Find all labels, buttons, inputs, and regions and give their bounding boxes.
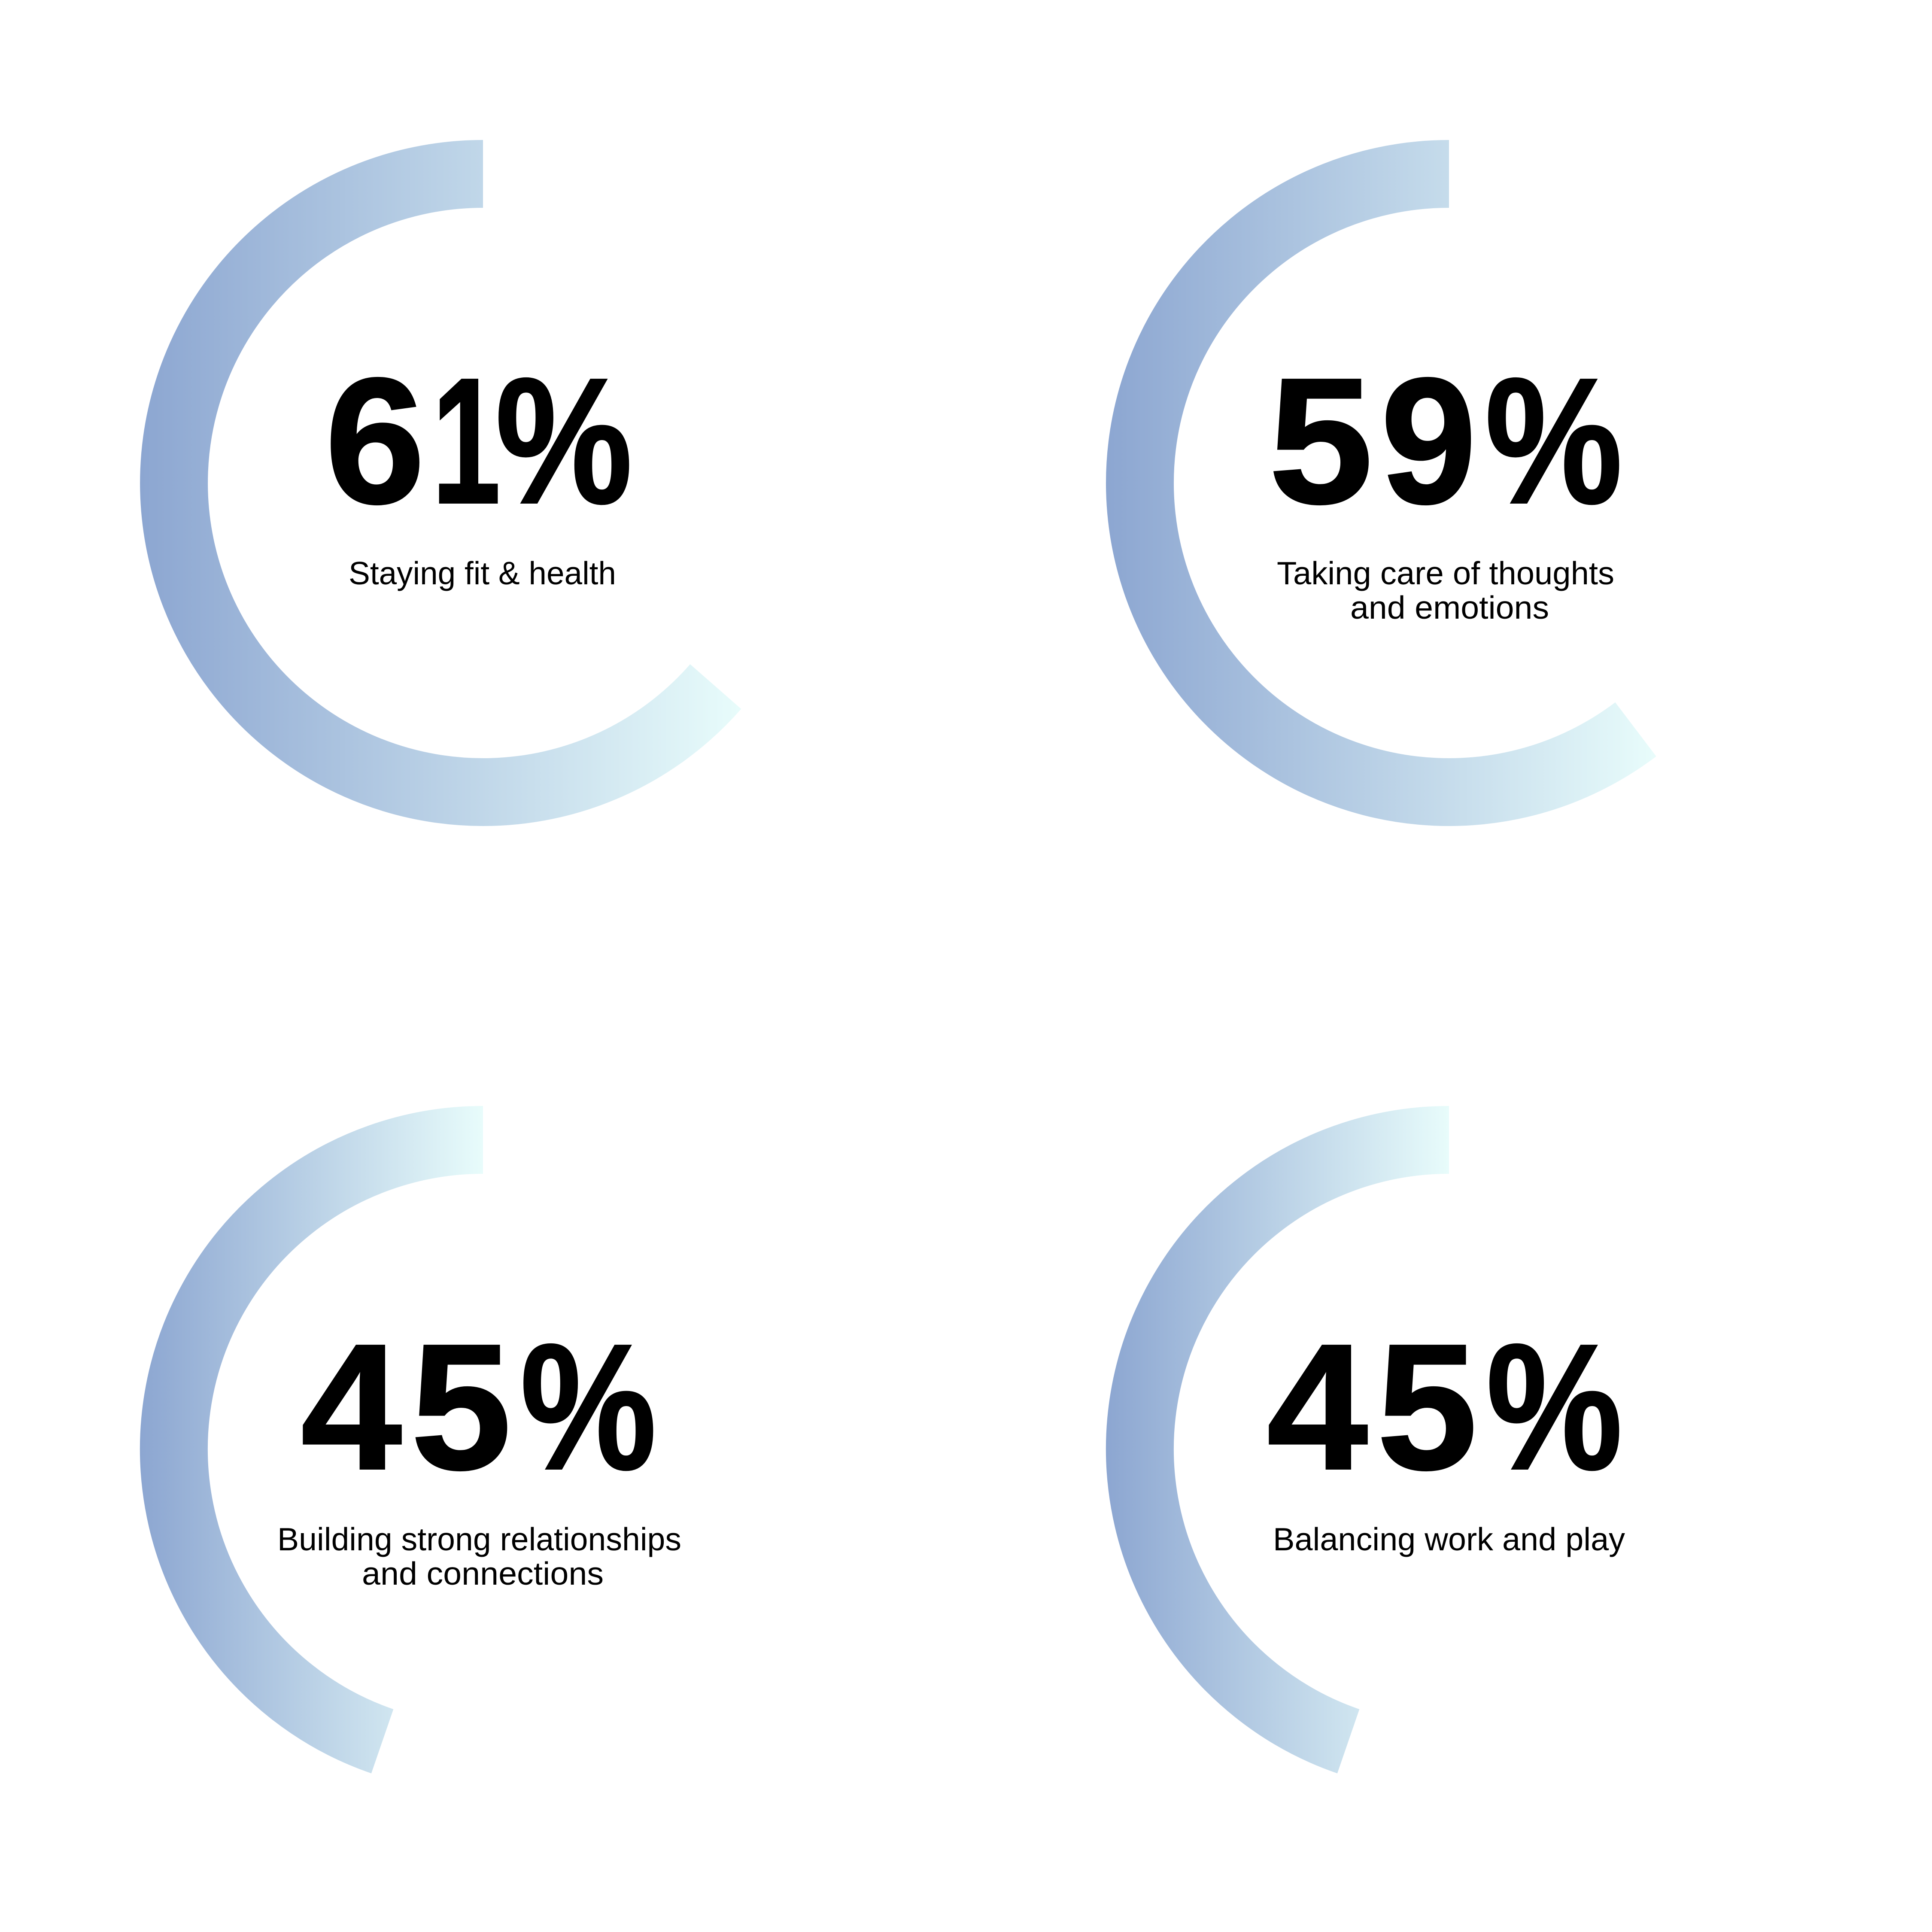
panel: 59% taking care of thoughts and emotions [1140, 174, 1636, 792]
stat: 45%: % [520, 1307, 656, 1507]
ring chart: 45% [174, 1140, 483, 1741]
stat: 45%: 4 [301, 1307, 403, 1507]
stat: 45%: 5 [1377, 1307, 1477, 1507]
stat: 61%: 6 [325, 341, 425, 541]
label: Staying fit & health: Staying fit & health [349, 555, 616, 591]
stat: 45%: % [1486, 1307, 1622, 1507]
label: Taking care of thoughts and emotions: Taking care of thoughts [1277, 555, 1614, 591]
stat: 61%: % [495, 341, 632, 541]
ring chart: 61% [174, 174, 716, 792]
label: Building strong relationships and connections: and connections [362, 1555, 604, 1592]
panel: 45% building strong relationships and connections [174, 1140, 681, 1741]
label: Taking care of thoughts and emotions: and emotions [1350, 589, 1549, 626]
stat: 59%: 9 [1381, 341, 1476, 541]
label: Building strong relationships and connections: Building strong relationships [277, 1521, 681, 1557]
stat: 45%: 5 [411, 1307, 511, 1507]
stat: 61%: 1 [432, 341, 501, 541]
stat: 45%: 4 [1267, 1307, 1369, 1507]
panel: 61% staying fit and health [174, 174, 716, 792]
stat: 59%: % [1485, 341, 1622, 541]
label: Taking care of thoughts and emotions [1277, 555, 1614, 626]
panel: 45% balancing work and play [1140, 1140, 1625, 1741]
ring chart: 45% [1140, 1140, 1449, 1741]
stat: 59%: 5 [1269, 341, 1373, 541]
label: Building strong relationships and connections [277, 1521, 681, 1592]
label: Balancing work and play: Balancing work and play [1273, 1521, 1625, 1557]
ring chart: 59% [1140, 174, 1636, 792]
